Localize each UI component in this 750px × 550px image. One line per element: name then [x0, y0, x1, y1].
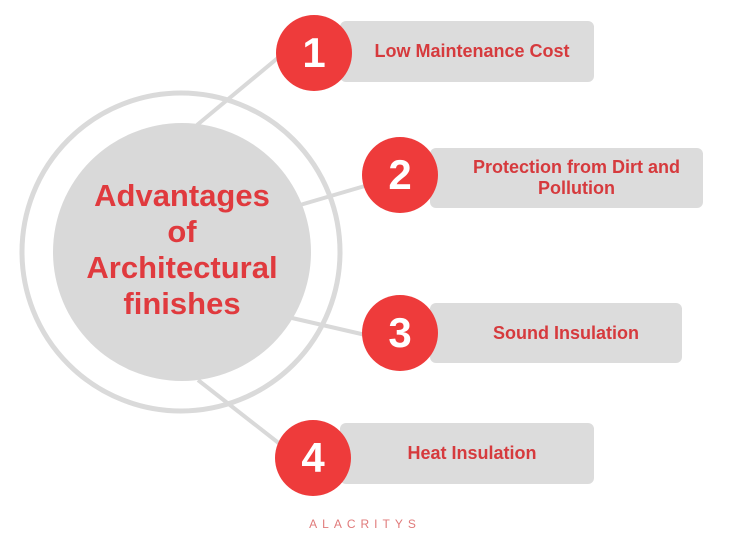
- box 4: [340, 423, 594, 484]
- title: Advantages: [94, 178, 270, 213]
- box 1: [340, 21, 594, 82]
- badge 1: [276, 15, 352, 91]
- badge 2: 2: [388, 151, 412, 198]
- badge 4: [275, 420, 351, 496]
- title: Architectural: [86, 250, 278, 285]
- title: [86, 178, 278, 321]
- box 4: Heat Insulation: [407, 443, 536, 463]
- badge 2: [362, 137, 438, 213]
- item 4: [275, 420, 594, 496]
- item 2: [362, 137, 703, 213]
- item 3: [362, 295, 682, 371]
- box 2: [430, 148, 703, 208]
- badge 3: 3: [388, 309, 412, 356]
- box 2: Protection from Dirt and: [473, 157, 680, 177]
- brand: ALACRITYS: [309, 517, 421, 531]
- badge 4: 4: [301, 434, 325, 481]
- title: finishes: [123, 286, 241, 321]
- badge 1: 1: [302, 29, 326, 76]
- title: of: [167, 214, 197, 249]
- box 3: [430, 303, 682, 363]
- box 1: Low Maintenance Cost: [374, 41, 570, 61]
- badge 3: [362, 295, 438, 371]
- box 2: Pollution: [538, 178, 615, 198]
- item 1: [276, 15, 594, 91]
- box 3: Sound Insulation: [493, 322, 639, 342]
